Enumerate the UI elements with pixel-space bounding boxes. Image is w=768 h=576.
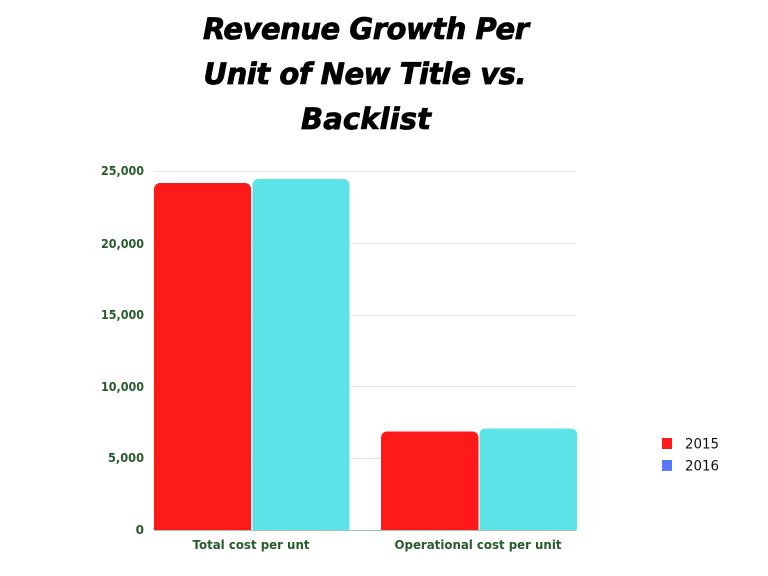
y axis labels: 25,000 (101, 164, 144, 178)
y axis labels (101, 164, 144, 537)
legend: 2016 (685, 458, 719, 474)
legend swatch: 2015 (662, 438, 672, 449)
bar: operational cost 2016 (480, 428, 577, 530)
y axis labels: 5,000 (108, 451, 144, 465)
legend (662, 436, 719, 474)
bar: total cost 2015 (154, 183, 251, 530)
y axis labels: 20,000 (101, 237, 144, 251)
bar: operational cost 2015 (381, 432, 478, 530)
title: Revenue Growth Per (203, 12, 531, 46)
title: Backlist (301, 102, 432, 136)
y axis labels: 0 (136, 523, 144, 537)
x axis labels (192, 538, 562, 552)
y axis labels: 15,000 (101, 308, 144, 322)
x axis labels: Operational cost per unit (394, 538, 562, 552)
legend: 2015 (685, 436, 719, 452)
x axis labels: Total cost per unt (192, 538, 310, 552)
legend swatch: 2016 (662, 460, 672, 471)
bar chart (154, 179, 577, 530)
bar: total cost 2016 (252, 179, 350, 530)
title (203, 12, 531, 136)
y axis labels: 10,000 (101, 380, 144, 394)
title: Unit of New Title vs. (204, 57, 526, 91)
